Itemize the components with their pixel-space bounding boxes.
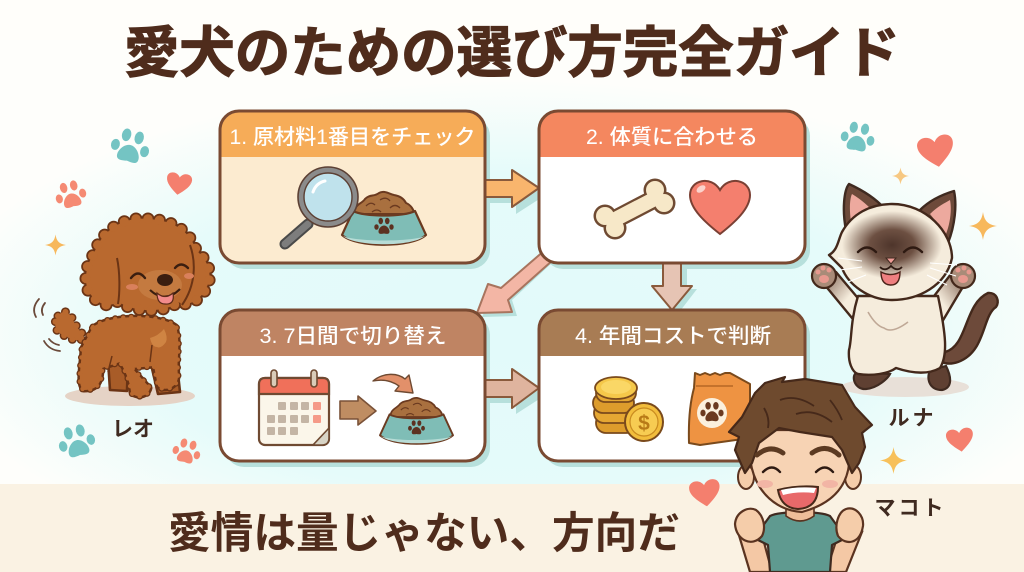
back legs: [108, 355, 180, 394]
icon: dog food bag: [689, 373, 750, 445]
label: Luna: ルナ: [888, 407, 934, 430]
panel: step 4: [539, 310, 805, 461]
panel: step 2: [539, 111, 805, 263]
label: Leo: レオ: [112, 418, 154, 441]
icon: coins: $: [638, 412, 650, 435]
arrow: step 2 to step 4: [652, 261, 697, 315]
icon: small arrow: [340, 396, 376, 425]
fists: [735, 508, 863, 542]
decoration: right paws, hearts and sparkles: [688, 120, 997, 508]
hair: [729, 377, 872, 473]
icon: food bowl: [380, 398, 453, 444]
icon: bone: [594, 178, 676, 240]
panel shadows: [225, 117, 810, 467]
closing message: 愛情は量じゃない、方向だ: [168, 510, 680, 558]
icon: food bowl: [342, 192, 426, 245]
shadow: [841, 377, 969, 397]
neck: [786, 498, 814, 521]
shadow: [65, 386, 195, 406]
label: Makoto: マコト: [874, 497, 944, 520]
character: Makoto: [729, 377, 872, 572]
panel: step 1: [220, 111, 485, 263]
character: Leo the poodle: [34, 219, 210, 406]
step 3 heading: 3. 7日間で切り替え: [260, 325, 446, 348]
icon: curved arrow: [373, 374, 413, 393]
arrow: step 1 to step 2: [483, 170, 544, 214]
shirt: [754, 512, 846, 572]
head: [829, 204, 952, 300]
icon: coins: [593, 377, 663, 441]
step 2 heading: 2. 体質に合わせる: [586, 126, 758, 149]
ears: [738, 465, 861, 489]
face: [838, 248, 957, 285]
tail: [942, 293, 998, 364]
icon: heart: [690, 181, 750, 234]
character: Luna the Siamese cat: [812, 184, 998, 397]
tail: [55, 312, 84, 340]
face mask: [842, 211, 942, 279]
panel: step 3: [220, 310, 485, 461]
step 4 heading: 4. 年間コストで判断: [575, 325, 771, 348]
arrow: step 2 to step 3: [477, 250, 553, 317]
arrow: step 3 to step 4: [483, 369, 544, 414]
step 1 heading: 1. 原材料1番目をチェック: [230, 126, 476, 149]
face: [126, 264, 194, 304]
bottom band: [0, 484, 1024, 572]
feet: [854, 366, 950, 390]
arms: [738, 532, 862, 572]
icon: calendar: [259, 370, 329, 445]
decoration: left paws and sparkle: [45, 125, 203, 466]
body: [849, 296, 945, 375]
wag lines: [34, 299, 60, 351]
icon: magnifying glass: [285, 167, 358, 244]
head and ears: [86, 219, 210, 310]
arms: [824, 272, 862, 318]
ears: [844, 184, 955, 243]
body and front legs: [80, 317, 178, 396]
face: [750, 430, 850, 512]
paws: [812, 264, 975, 288]
eyebrows, eyes, cheeks and mouth: [757, 448, 839, 509]
title: 愛犬のための選び方完全ガイド: [124, 22, 900, 84]
